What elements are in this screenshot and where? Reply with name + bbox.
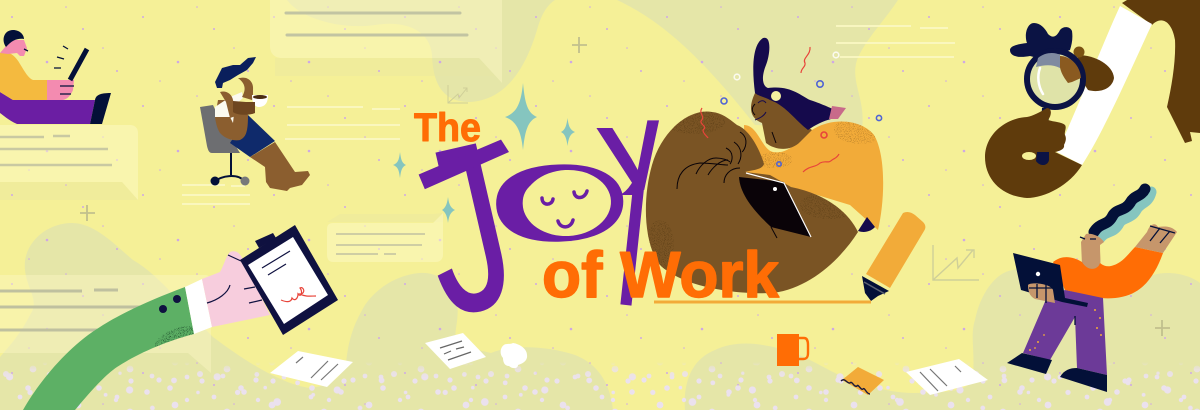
tablet camera <box>773 187 777 191</box>
hand lines <box>207 255 262 303</box>
orange dress <box>744 122 883 230</box>
reflected hair <box>1036 53 1060 68</box>
mouth <box>558 220 573 227</box>
highlighter band <box>864 282 885 294</box>
hand and motion lines <box>24 46 74 94</box>
laptop <box>1013 253 1088 307</box>
letter y left arm: y <box>596 89 682 205</box>
hair <box>4 30 24 47</box>
lens <box>1027 51 1083 107</box>
cuff <box>185 279 212 334</box>
coffee <box>253 95 267 99</box>
hand <box>47 80 74 100</box>
highlighter <box>654 212 925 302</box>
handle between fingers <box>1036 152 1049 165</box>
clip <box>255 233 276 248</box>
tablet edge <box>746 173 811 237</box>
hair <box>1094 189 1145 232</box>
shoes <box>1007 353 1107 392</box>
back of head <box>238 78 253 100</box>
white sleeve <box>1057 6 1152 165</box>
sleeve grain <box>155 326 194 347</box>
large chart icon <box>933 245 979 280</box>
white text lines <box>182 26 955 204</box>
tablet <box>739 177 811 237</box>
body grain <box>646 110 860 270</box>
hair <box>753 38 840 130</box>
hand <box>202 251 270 327</box>
woman with laptop, bottom right <box>1007 189 1177 392</box>
arm with magnifying glass <box>985 0 1200 198</box>
letter J: J <box>387 97 549 393</box>
finger gap <box>1022 152 1036 160</box>
paper: centre <box>425 333 486 369</box>
paper: left <box>270 351 353 387</box>
title word: Joy <box>418 120 659 312</box>
letter O: O <box>487 140 633 266</box>
hair <box>215 57 256 88</box>
speech bubble: left <box>0 125 138 200</box>
paper: right <box>906 359 988 395</box>
dress grain <box>761 122 876 168</box>
notebook <box>841 367 884 395</box>
signature <box>281 288 316 302</box>
navy foot <box>858 217 875 232</box>
cuff buttons <box>159 295 181 313</box>
face inside the O <box>521 168 613 238</box>
ear <box>1074 46 1084 58</box>
paper <box>248 237 328 324</box>
raised hand <box>1135 224 1177 253</box>
speech bubble: top <box>270 0 502 83</box>
magnifier handle <box>1041 108 1050 125</box>
tablet <box>70 49 87 80</box>
trousers <box>0 92 95 124</box>
bubble drop shadows <box>0 58 502 222</box>
clipboard <box>240 225 338 335</box>
shirt and arm <box>1053 247 1163 298</box>
underline <box>654 300 871 304</box>
legs <box>250 142 310 191</box>
trousers <box>1023 290 1107 375</box>
chair <box>200 105 240 153</box>
raised arm <box>220 91 236 118</box>
man with tablet, top left <box>0 30 111 124</box>
upper arm <box>1122 0 1200 143</box>
letter y right arm: y <box>587 14 664 332</box>
hair tip <box>829 106 846 119</box>
highlighter barrel <box>866 212 925 288</box>
hand <box>233 101 255 115</box>
mug <box>777 334 808 366</box>
letter J crossbar: J <box>316 81 640 410</box>
teal hair shadow <box>1100 192 1151 238</box>
green arm with clipboard <box>23 225 338 410</box>
left eye <box>542 198 553 204</box>
shirt <box>215 92 243 123</box>
small chart icon <box>448 85 468 103</box>
finger and face lines <box>1029 226 1175 325</box>
shoe <box>90 93 111 124</box>
glasses eye <box>770 90 782 102</box>
shorts <box>230 115 275 157</box>
title word: The: The <box>414 106 481 150</box>
face opening <box>521 168 613 238</box>
person on chair with coffee <box>200 57 310 191</box>
right eye <box>574 191 587 198</box>
neck and head <box>1081 234 1104 271</box>
chair base <box>216 153 244 181</box>
lilac speckled ground <box>0 362 1200 410</box>
sleeve <box>23 287 194 410</box>
lens shine <box>1038 68 1043 94</box>
big woman with tablet <box>646 38 886 293</box>
crumpled paper <box>501 343 527 368</box>
wheels <box>210 176 250 186</box>
finger lines <box>677 104 777 238</box>
torso <box>215 100 248 140</box>
highlighter nib <box>862 276 889 301</box>
speech bubble: middle <box>327 213 443 262</box>
rings and squiggles <box>701 47 882 172</box>
brown body <box>646 112 858 293</box>
paper lines <box>262 251 290 275</box>
speech bubble: lower left <box>0 275 211 373</box>
reflected face <box>1059 56 1081 83</box>
hair <box>1010 23 1072 60</box>
shirt <box>0 52 47 100</box>
face <box>0 40 27 56</box>
smiling face <box>755 101 766 120</box>
neck and head <box>751 93 812 149</box>
sparkles <box>393 83 575 223</box>
holding hand <box>1028 283 1055 303</box>
laptop camera <box>1036 272 1040 276</box>
trouser speckle <box>1029 309 1102 351</box>
title words: of Work: of Work <box>542 238 780 311</box>
head <box>1075 55 1114 91</box>
plus marks <box>80 37 1170 336</box>
hand <box>985 108 1082 198</box>
coffee cup <box>252 95 268 107</box>
